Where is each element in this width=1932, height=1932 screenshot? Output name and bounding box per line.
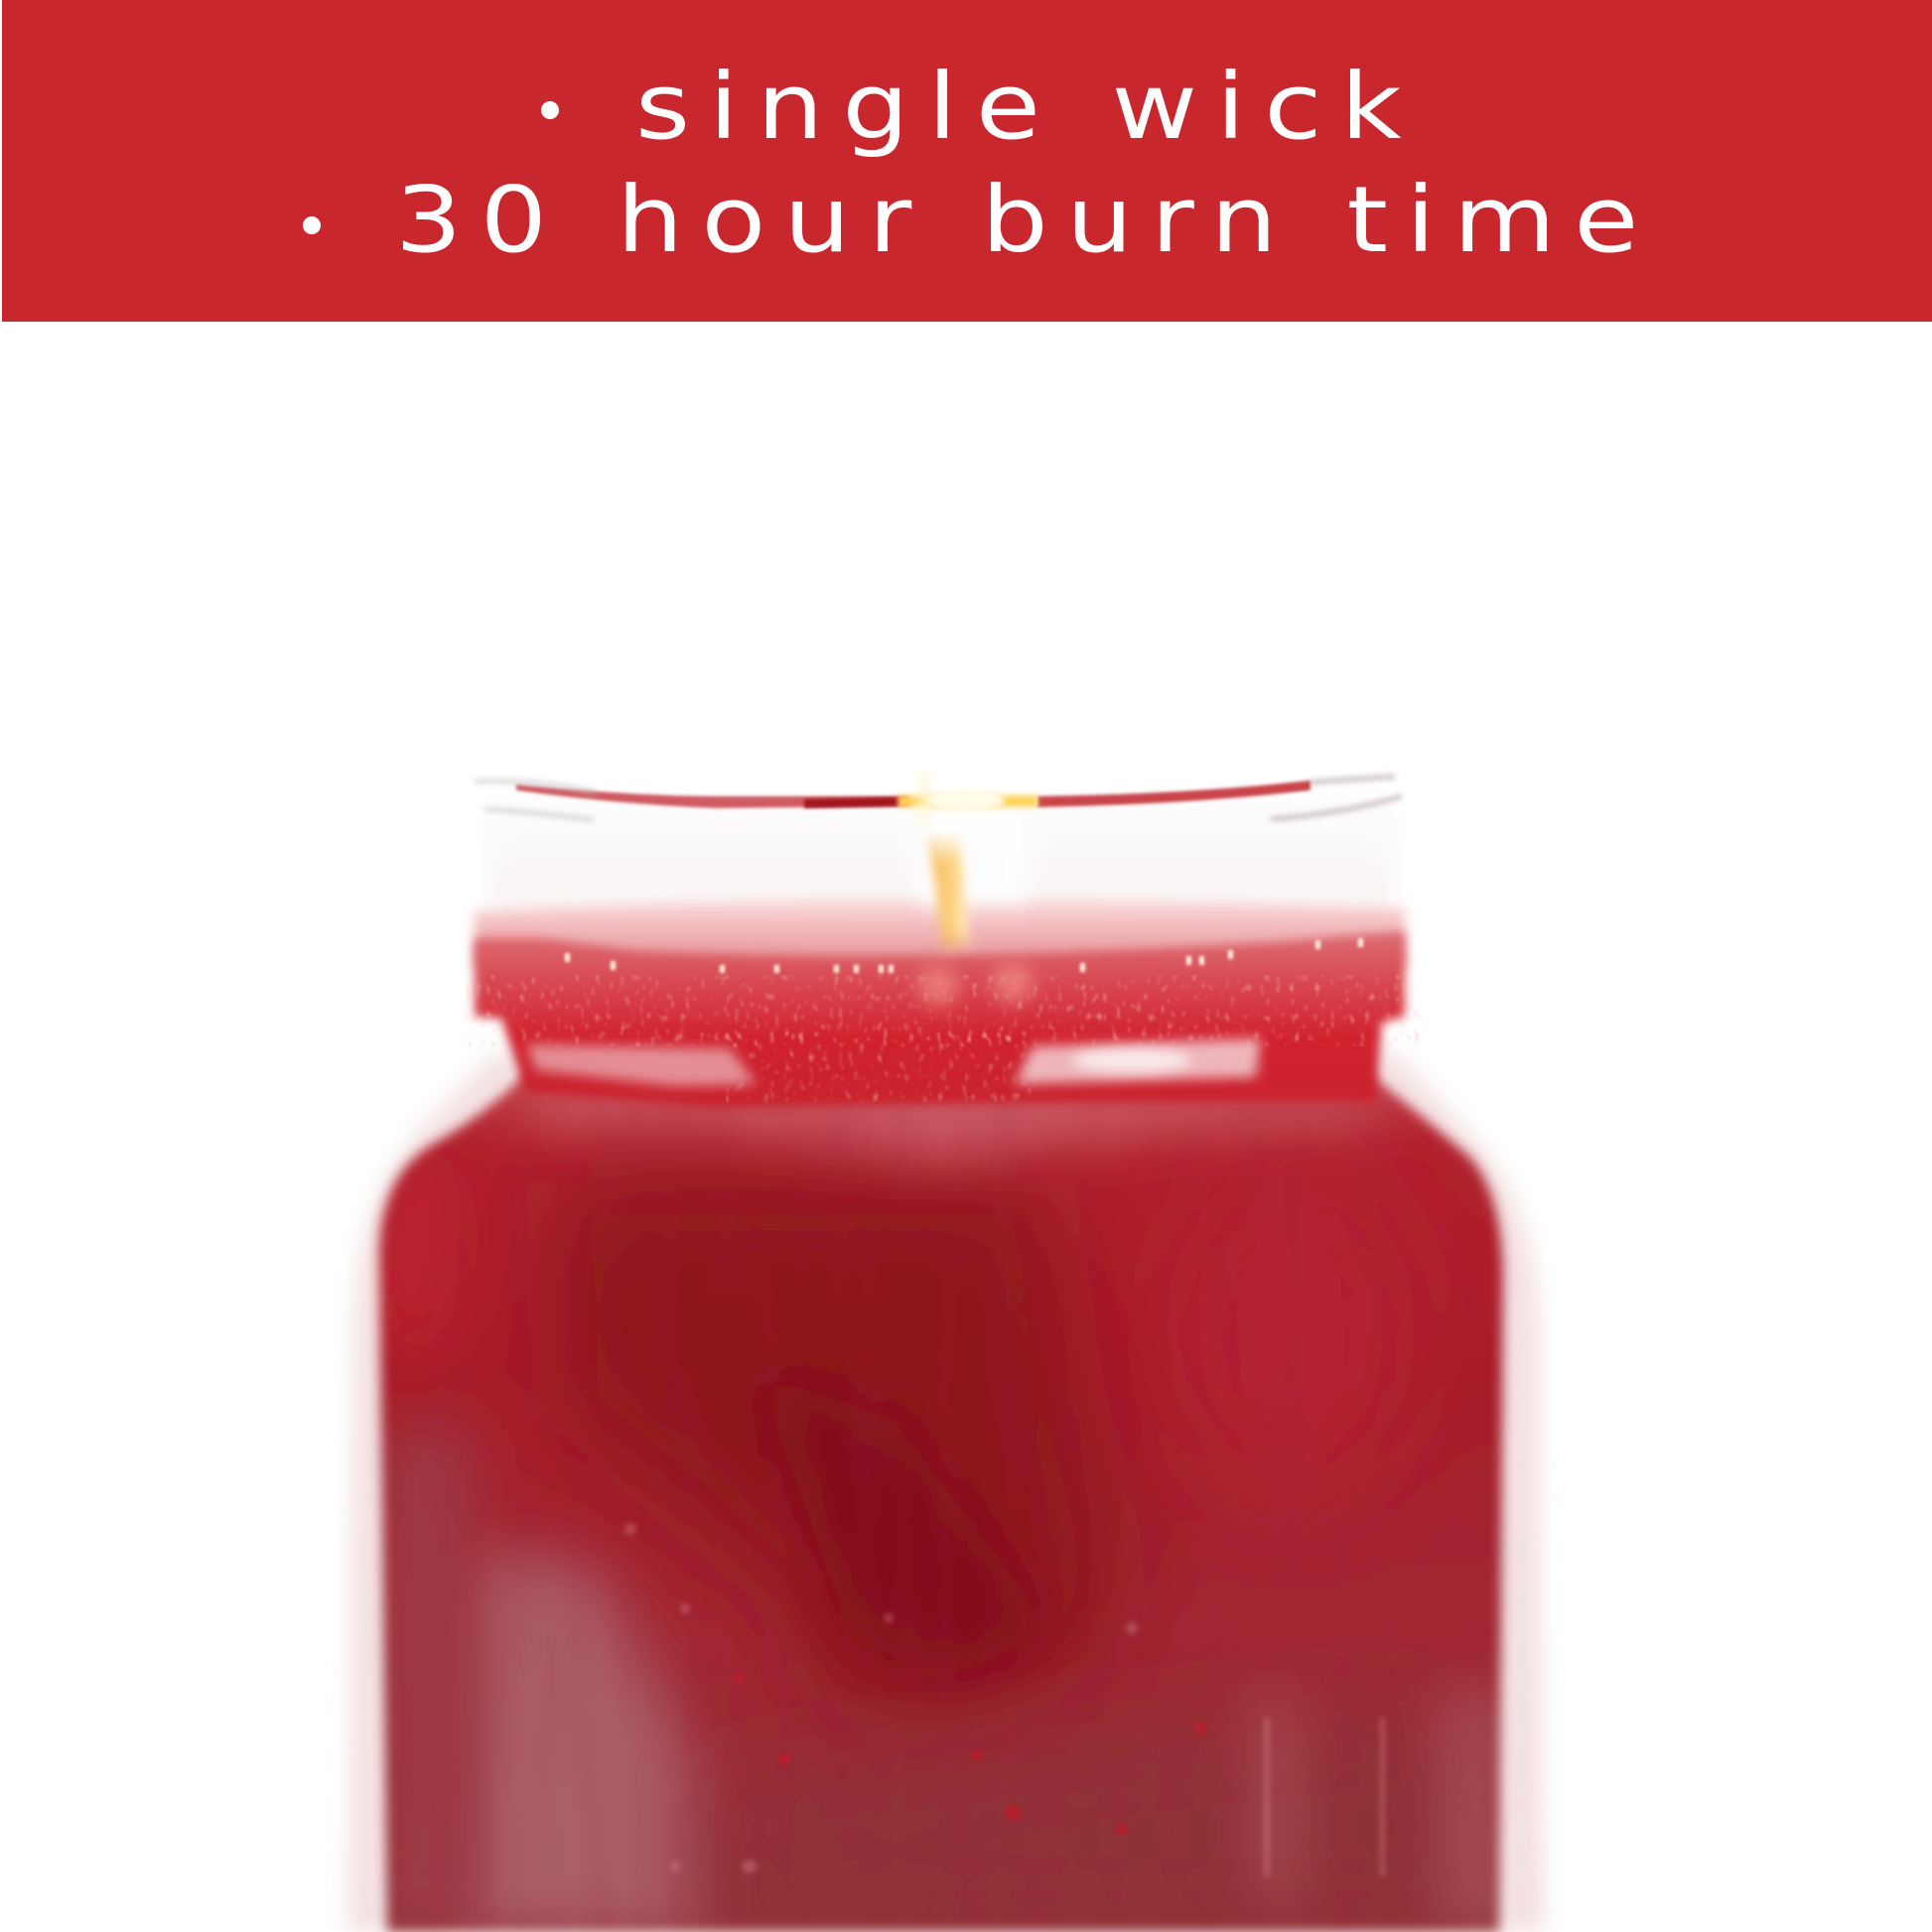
rim glass right edge	[1271, 776, 1402, 819]
wax body	[367, 1062, 1519, 1932]
rim glass left edge	[475, 781, 596, 820]
pale band under collar	[496, 1082, 1390, 1157]
soft glow around flame	[918, 794, 1028, 903]
lower-right pale edge	[1440, 1688, 1509, 1932]
glass neck	[486, 799, 1396, 913]
pale right streak	[1251, 1688, 1301, 1906]
pink wax surface	[475, 899, 1405, 968]
bullet dot: 30 hour burn time	[303, 216, 321, 234]
bullet line: 30 hour burn time: 30 hour burn time	[395, 168, 1638, 273]
red collar band	[475, 931, 1405, 1107]
glass jar outer body	[347, 1052, 1545, 1932]
flame glare spike	[918, 774, 930, 824]
flame	[925, 834, 971, 950]
brown lower band	[927, 1661, 1398, 1839]
jar rim red line: left	[516, 784, 908, 808]
flame glare centre	[925, 789, 1005, 811]
wax bubbles	[733, 1672, 1207, 1835]
pale wax flecks	[624, 1523, 1385, 1876]
bright left side	[387, 1198, 451, 1342]
candle jar photo	[347, 774, 1545, 1932]
jar rim red line: right	[1037, 780, 1311, 807]
left rim pale strip	[382, 1430, 472, 1932]
bright bubbles on melt line	[565, 938, 1363, 973]
jar rim dark segment	[804, 797, 898, 808]
flame glare on rim	[898, 795, 1037, 807]
red header banner	[2, 0, 1932, 322]
mauve lower-left highlight	[457, 1549, 705, 1932]
left pale reflection under collar	[526, 1044, 757, 1086]
darkest core	[755, 1370, 1052, 1678]
right pale reflection under collar	[1015, 1038, 1261, 1084]
right highlight core	[1072, 1048, 1191, 1072]
bright right side	[1221, 1267, 1361, 1463]
speckled wax texture	[491, 981, 1395, 1097]
vertical streak texture	[562, 1110, 1040, 1684]
dark heart shape in wax	[556, 1181, 1122, 1718]
glow on wax	[918, 963, 1033, 1006]
bullet dot: single wick	[541, 101, 559, 119]
bullet line: single wick: single wick	[635, 55, 1402, 160]
